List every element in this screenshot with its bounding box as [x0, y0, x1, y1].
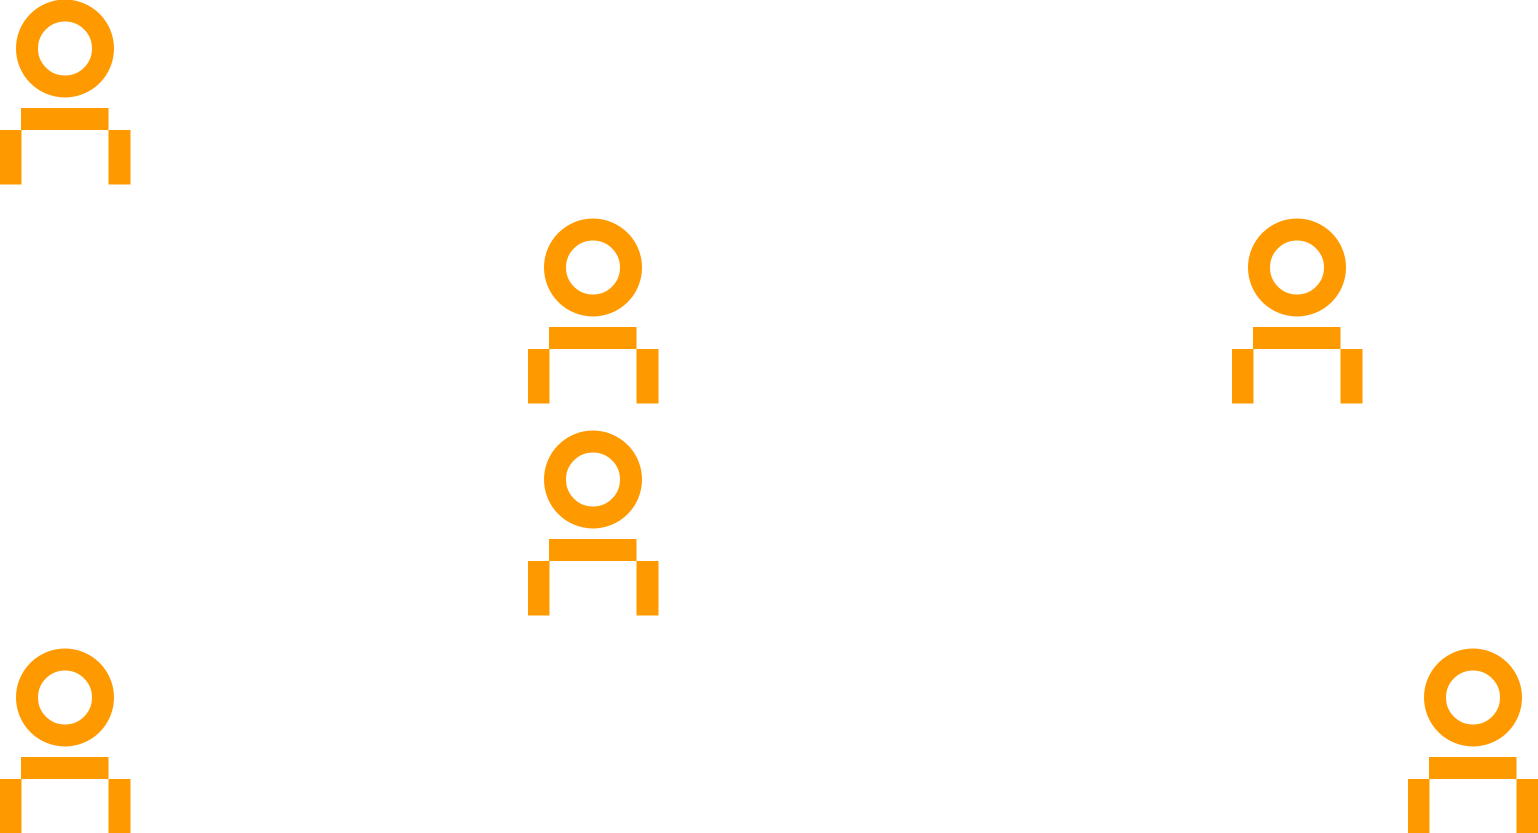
icon: person top-left [0, 10, 130, 184]
icon: person bottom-right [1408, 660, 1538, 833]
icon: person right-upper [1232, 230, 1362, 404]
icon: person middle-upper [528, 230, 658, 404]
icon: person middle-lower [528, 442, 658, 616]
icon: person bottom-left [0, 660, 130, 833]
